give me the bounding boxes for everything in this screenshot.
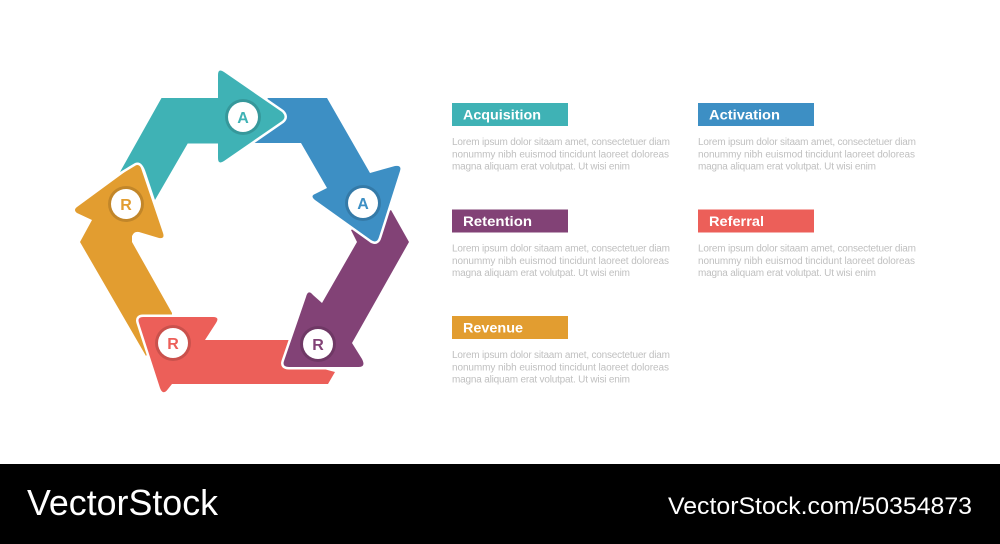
text block: Retention: nonummy nibh euismod tincidunt laoreet doloreas [452, 256, 669, 267]
text block: Referral: Lorem ipsum dolor sitaam amet, consectetuer diam [698, 244, 916, 254]
footer URL: VectorStock.com/50354873 [668, 493, 972, 520]
text block: Activation: magna aliquam erat volutpat. Ut wisi enim [698, 162, 876, 172]
text block: Acquisition: Lorem ipsum dolor sitaam amet, consectetuer diam [452, 137, 670, 148]
arrow: retention stage (orange): R [120, 197, 132, 214]
arrow: activation stage (blue): A [357, 196, 369, 213]
text block: Retention: Retention [463, 213, 532, 229]
text block: Referral: Referral [709, 213, 764, 229]
text block: Revenue: Revenue [463, 320, 523, 336]
arrow: referral stage (purple) [284, 210, 409, 367]
arrow: activation stage (blue) [250, 98, 400, 241]
text block: Revenue: nonummy nibh euismod tincidunt laoreet doloreas [452, 362, 669, 374]
text block: Revenue: magna aliquam erat volutpat. Ut wisi enim [452, 374, 630, 386]
text block: Referral [698, 210, 916, 279]
text block: Retention: Lorem ipsum dolor sitaam amet, consectetuer diam [452, 244, 670, 254]
text block: Activation: Lorem ipsum dolor sitaam amet, consectetuer diam [698, 137, 916, 148]
text block: Revenue: Lorem ipsum dolor sitaam amet, consectetuer diam [452, 350, 670, 361]
text block: Retention: magna aliquam erat volutpat. Ut wisi enim [452, 268, 630, 279]
text block: Referral: nonummy nibh euismod tincidunt laoreet doloreas [698, 256, 915, 267]
footer bar [0, 464, 1000, 544]
text block: Acquisition: Acquisition [463, 106, 541, 122]
cycle diagram [75, 71, 409, 392]
text block: Referral: magna aliquam erat volutpat. Ut wisi enim [698, 268, 876, 279]
arrow: revenue stage (red) [138, 317, 335, 392]
text block: Acquisition [452, 103, 670, 172]
text block: Activation [698, 103, 916, 172]
arrow: revenue stage (red): R [167, 336, 179, 353]
text block: Acquisition: nonummy nibh euismod tincidunt laoreet doloreas [452, 150, 669, 160]
text block: Revenue [452, 316, 670, 386]
text block: Activation: Activation [709, 106, 780, 122]
text block: Activation: nonummy nibh euismod tincidunt laoreet doloreas [698, 150, 915, 160]
arrow: retention stage (orange) [75, 164, 172, 356]
text block: Acquisition: magna aliquam erat volutpat. Ut wisi enim [452, 162, 630, 172]
arrow: referral stage (purple): R [312, 337, 324, 354]
footer logo text: VectorStock [27, 482, 219, 523]
arrow: acquisition stage (teal) [120, 71, 284, 200]
text block: Retention [452, 210, 670, 279]
arrow: acquisition stage (teal): A [237, 110, 249, 127]
